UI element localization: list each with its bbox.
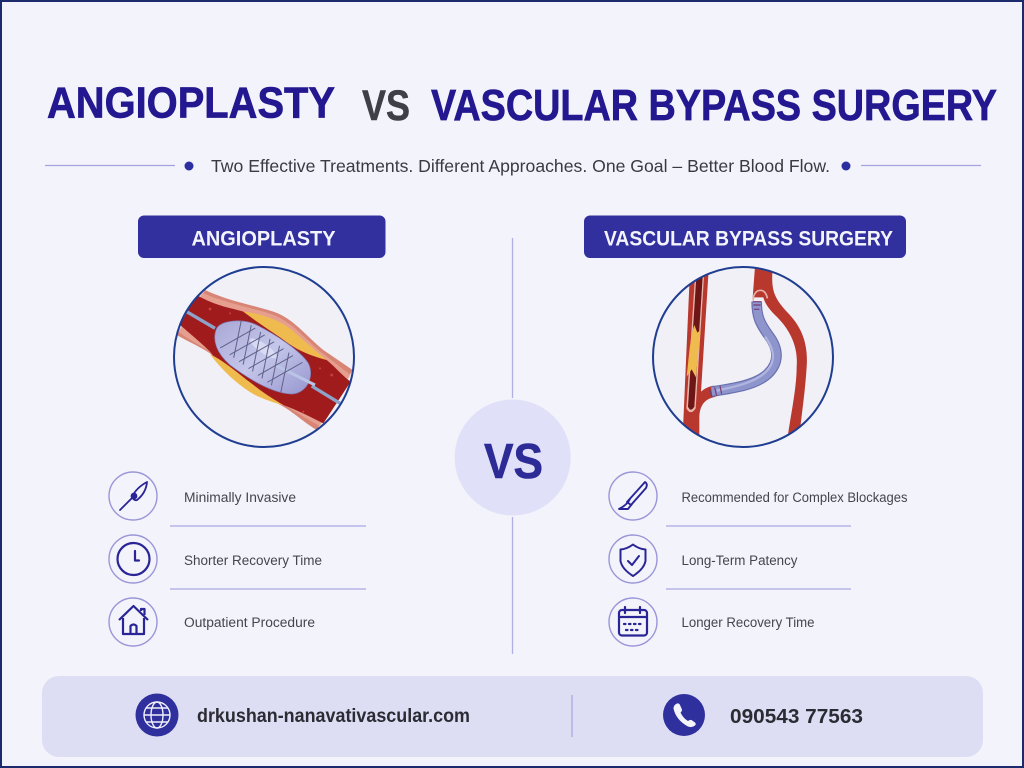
- icon: shield with check: [620, 544, 646, 576]
- panel: vascular bypass surgery: [584, 216, 908, 646]
- subtitle: [45, 156, 981, 176]
- title: VS: [362, 82, 410, 130]
- feature: longer recovery time: [609, 598, 814, 646]
- title: [47, 78, 997, 130]
- phone number: 090543 77563: [730, 705, 863, 728]
- website: drkushan-nanavativascular.com: [197, 706, 470, 727]
- heading: vascular bypass surgery: VASCULAR BYPASS SURGERY: [604, 228, 893, 250]
- center divider with VS badge: [455, 238, 571, 654]
- illustration: balloon angioplasty in artery: [174, 267, 354, 447]
- feature: long-term patency: Long-Term Patency: [682, 553, 798, 568]
- heading: angioplasty: [138, 216, 386, 258]
- feature: longer recovery time: Longer Recovery Time: [682, 615, 814, 630]
- illustration: bypass graft around blocked artery: [653, 267, 833, 447]
- footer contact bar: [42, 676, 983, 757]
- title: ANGIOPLASTY: [47, 78, 335, 128]
- feature: outpatient procedure: Outpatient Procedure: [184, 615, 315, 630]
- icon: clock: [118, 543, 150, 575]
- feature: outpatient procedure: [109, 598, 315, 646]
- feature: shorter recovery time: [109, 535, 322, 583]
- heading: angioplasty: ANGIOPLASTY: [192, 226, 336, 250]
- feature: shorter recovery time: Shorter Recovery Time: [184, 553, 322, 568]
- icon: phone: [663, 694, 705, 736]
- subtitle: Two Effective Treatments. Different Approaches. One Goal – Better Blood Flow.: [211, 156, 830, 176]
- icon: house: [119, 606, 148, 634]
- icon: calendar: [619, 607, 647, 636]
- feature: minimally invasive: Minimally Invasive: [184, 490, 296, 505]
- feature: recommended for complex blockages: Recommended for Complex Blockages: [682, 490, 908, 505]
- icon: catheter needle: [120, 482, 147, 510]
- panel: angioplasty: [109, 216, 386, 646]
- feature: long-term patency: [609, 535, 798, 583]
- icon: globe: [136, 694, 178, 736]
- icon: scalpel: [619, 482, 647, 509]
- center divider with VS badge: VS: [484, 435, 543, 489]
- heading: vascular bypass surgery: [584, 216, 906, 258]
- feature: minimally invasive: [109, 472, 296, 520]
- feature: recommended for complex blockages: [609, 472, 908, 520]
